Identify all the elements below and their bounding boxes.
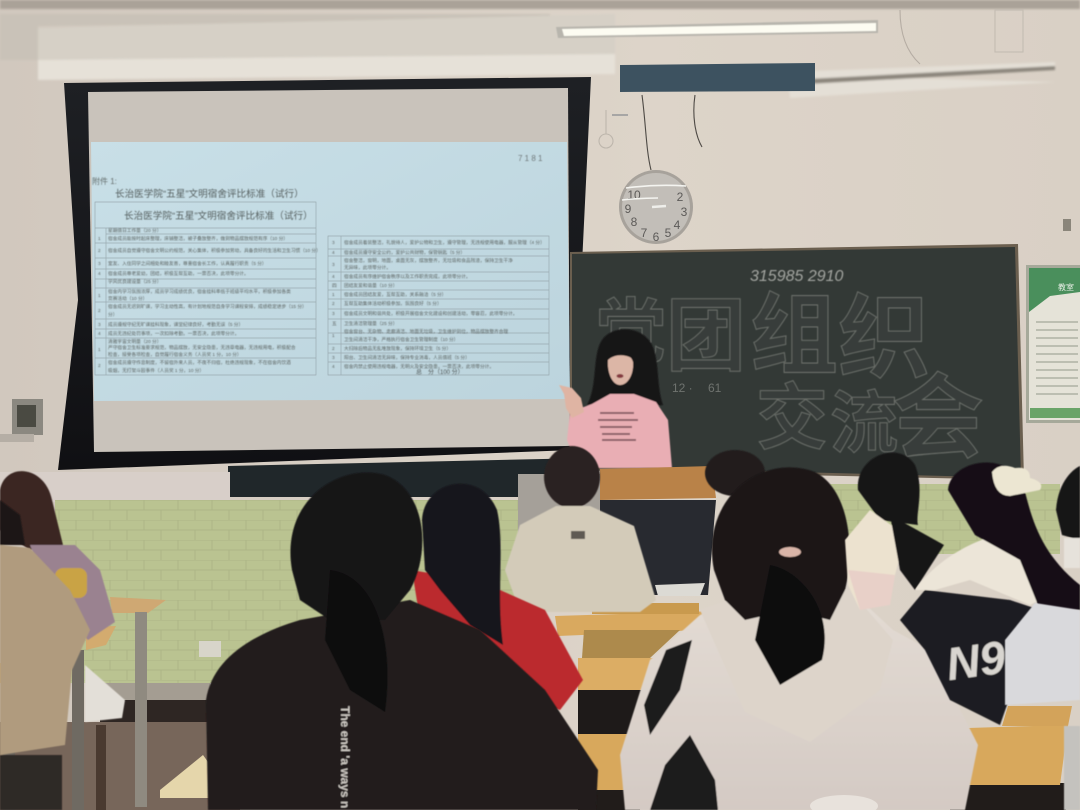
hair back [587, 329, 663, 408]
right table: 宿舍成员团结友爱，互帮互助，关系融洽（5 分） [344, 291, 446, 298]
pink hoodie [567, 394, 672, 468]
clock: 4 [674, 218, 681, 232]
hair scrunchie [992, 466, 1041, 496]
projection screen [88, 88, 570, 452]
right table: 无异味，此项零分计。 [344, 264, 391, 271]
clock: 9 [625, 202, 632, 216]
wires and wall fittings [599, 10, 1071, 231]
wall poster [1026, 265, 1080, 423]
left table: 3 [98, 261, 101, 266]
left table: 宿舍成员能按时起床整理，床铺整洁，被子叠放整齐，做到物品摆放规范有序（10 分） [108, 235, 288, 242]
student beige jacket [505, 446, 656, 612]
right table: 3 [332, 262, 335, 267]
hoodie print [598, 412, 638, 441]
right table: 总 分（100 分） [416, 368, 464, 376]
chalk title: 党团组织: 织 [838, 288, 930, 390]
left table: 清雅宇宙文明量（20 分） [108, 338, 161, 345]
face [608, 353, 633, 385]
clock: 3 [681, 205, 688, 219]
background student far centre [705, 450, 765, 496]
lower wall, brick panel and floor [0, 472, 1060, 810]
left table [95, 202, 321, 375]
projected slide [91, 142, 570, 401]
ceiling trim [0, 0, 1080, 98]
right table: 阳台、卫生间清洁无异味，保持专业消毒，人员值班（5 分） [344, 354, 470, 361]
right table: 4 [332, 250, 335, 255]
left table: 学风优良建设量（25 分） [108, 278, 161, 285]
right table: 四 [332, 283, 337, 288]
left table: 成员无违纪处罚事项，一次扣除考勤，一票否决，此项零分计。 [108, 330, 239, 337]
white cup bottom [810, 795, 878, 810]
left table: 宿舍成员无迟到旷课，学习主动性高，有计划地规范自身学习课程安排，成绩稳定进步（15 分） [108, 303, 307, 310]
projected slide: 长治医学院“五星”文明宿舍评比标准（试行） [115, 188, 304, 200]
student NY hoodie: N9 [943, 630, 1009, 690]
left table: 1 [98, 293, 101, 298]
left table: 宿舍成员自觉遵守宿舍文明公约规范，关心集体，积极参加劳动，具备良好的生活和卫生习惯（10 分） [108, 247, 321, 254]
left table: 2 [98, 363, 101, 368]
left table: 2 [98, 248, 101, 253]
left table: 成员遵规守纪无旷课挂科现象，课堂纪律良好，考勤无误（5 分） [108, 321, 243, 328]
chalk title: 交流会: 交 [756, 379, 828, 459]
left table: 4 [98, 271, 101, 276]
raised hand [559, 385, 584, 418]
right table: 宿舍成员文明和谐共处，积极开展宿舍文化建设和创建活动，零容忍，此项零分计。 [344, 310, 517, 317]
student front white jacket [620, 467, 978, 810]
ponytail [325, 570, 388, 712]
right table: 卫生清洁管理量（25 分） [344, 320, 397, 327]
right table: 卫生间清洁干净，严格执行宿舍卫生管理制度（10 分） [344, 336, 458, 343]
projected slide: 长治医学院“五星”文明宿舍评比标准（试行） [124, 210, 313, 222]
desk and chair left [0, 597, 166, 810]
right table: 宿舍成员着装整洁，礼貌待人，爱护公物和卫生，遵守管理，无违规使用电器，服从管理（4 分） [344, 239, 545, 246]
left table: 4 [98, 331, 101, 336]
wall poster: 教室 [1058, 282, 1074, 292]
ceiling light [556, 20, 878, 38]
left table: 室友、入住同学之间相处和睦友善，尊重宿舍长工作，认真履行职责（5 分） [108, 260, 267, 267]
right table: 3 [332, 311, 335, 316]
student left purple jacket [0, 471, 125, 722]
right table: 大扫除后物品无乱堆放现象，保持环境卫生（5 分） [344, 345, 451, 352]
chalk title: 交流会: 会 [892, 368, 984, 470]
right table: 团结友爱和谐量（10 分） [344, 282, 397, 289]
projection screen frame [58, 77, 591, 470]
right table: 3 [332, 355, 335, 360]
clock: 7 [641, 226, 648, 240]
blackboard [570, 244, 1024, 480]
projected slide: 附件 1: [92, 176, 117, 186]
left table: 2 [98, 308, 101, 313]
projected slide: 7 1 8 1 [518, 154, 543, 163]
presenter [559, 329, 672, 468]
left table: 严守宿舍卫生标准要求规范，物品摆放，无安全隐患，无违章电器，无违规用电，积极配合 [108, 344, 296, 351]
clock: 5 [665, 226, 672, 240]
left table: 宿舍内学习氛围浓厚，成员学习成绩优良，宿舍挂科率低于班级平均水平，积极参加各类 [108, 288, 291, 295]
left table: 3 [98, 322, 101, 327]
right table: 互帮互助集体活动积极参加，氛围良好（5 分） [344, 300, 442, 307]
left table: 1 [98, 236, 101, 241]
chalk small notes: 12 · 61 [672, 381, 722, 395]
student far right [1005, 466, 1080, 810]
student NY hoodie [900, 462, 1080, 725]
right table: 宿舍整洁，窗明，地面，桌面无灰，摆放整齐，无垃圾和食品残渣，保持卫生干净 [344, 257, 513, 264]
left table: 宿舍成员尊老爱幼，团结，积极互帮互助，一票否决，此项零分计。 [108, 270, 249, 277]
chalk title: 党团组织: 组 [750, 286, 838, 385]
right table: 2 [332, 346, 335, 351]
chalk title: 党团组织: 团 [666, 292, 746, 381]
chalk number: 315985 2910 [750, 268, 844, 285]
wall socket [0, 399, 43, 442]
right table: 宿舍成员遵守安全公约，爱护公共财物，保管钥匙（5 分） [344, 249, 465, 256]
right table: 4 [332, 364, 335, 369]
student hooded pink [845, 453, 944, 610]
clock [619, 170, 693, 244]
left table: 检查，接受各项检查，自觉履行宿舍义务（人员奖 1 分，10 分） [108, 351, 242, 358]
right table: 宿舍窗台、无杂物、走廊清洁、地面无垃圾，卫生维护到位，物品摆放整齐合理 [344, 328, 508, 335]
desk right [955, 725, 1068, 785]
student front left black jacket: The end 'a ways n [338, 706, 352, 808]
clock: 10 [627, 188, 641, 202]
chalk title: 党团组织 [596, 286, 930, 390]
left table: 吸烟，无打架斗殴事件（人员奖 1 分，10 分） [108, 367, 204, 374]
right table: 宿舍内禁止使用违规电器，无明火及安全隐患，一票否决，此项零分计。 [344, 363, 494, 370]
chalk title: 交流会: 流 [830, 386, 898, 462]
right table: 4 [332, 274, 335, 279]
student left khaki jacket [0, 500, 90, 810]
desk strip front row [578, 734, 640, 790]
dark board under projector [228, 458, 590, 497]
clock: 6 [653, 230, 660, 244]
left table: 竞赛活动（10 分） [108, 295, 147, 302]
dark duct [620, 63, 815, 92]
right table: 2 [332, 301, 335, 306]
left table: 宿舍成员遵守作息制度，不留宿外来人员，不夜不归宿，杜绝违规现象，不在宿舍内饮酒 [108, 359, 291, 366]
lectern and projector box [518, 466, 716, 595]
chalk title: 交流会 [756, 368, 984, 470]
desks middle and chairs [555, 583, 718, 736]
student front left black jacket [206, 472, 598, 810]
right table: 五 [332, 321, 337, 326]
desk front row left [160, 755, 228, 798]
chair right [1002, 706, 1072, 726]
dark under-desk area [578, 783, 1066, 810]
chalk title: 党团组织: 党 [596, 293, 666, 371]
student red jacket [412, 484, 583, 710]
left table: 1 [98, 347, 101, 352]
clock: 8 [631, 215, 638, 229]
right table [328, 236, 549, 376]
right table: 1 [332, 333, 335, 338]
left table: 星期值日工作量（20 分） [108, 227, 161, 234]
clock: 2 [677, 190, 684, 204]
left table: 分） [108, 311, 117, 318]
right table: 宿舍成员有序维护宿舍秩序以及工作职责完成，此项零分计。 [344, 273, 471, 280]
right table: 3 [332, 240, 335, 245]
right table: 1 [332, 292, 335, 297]
